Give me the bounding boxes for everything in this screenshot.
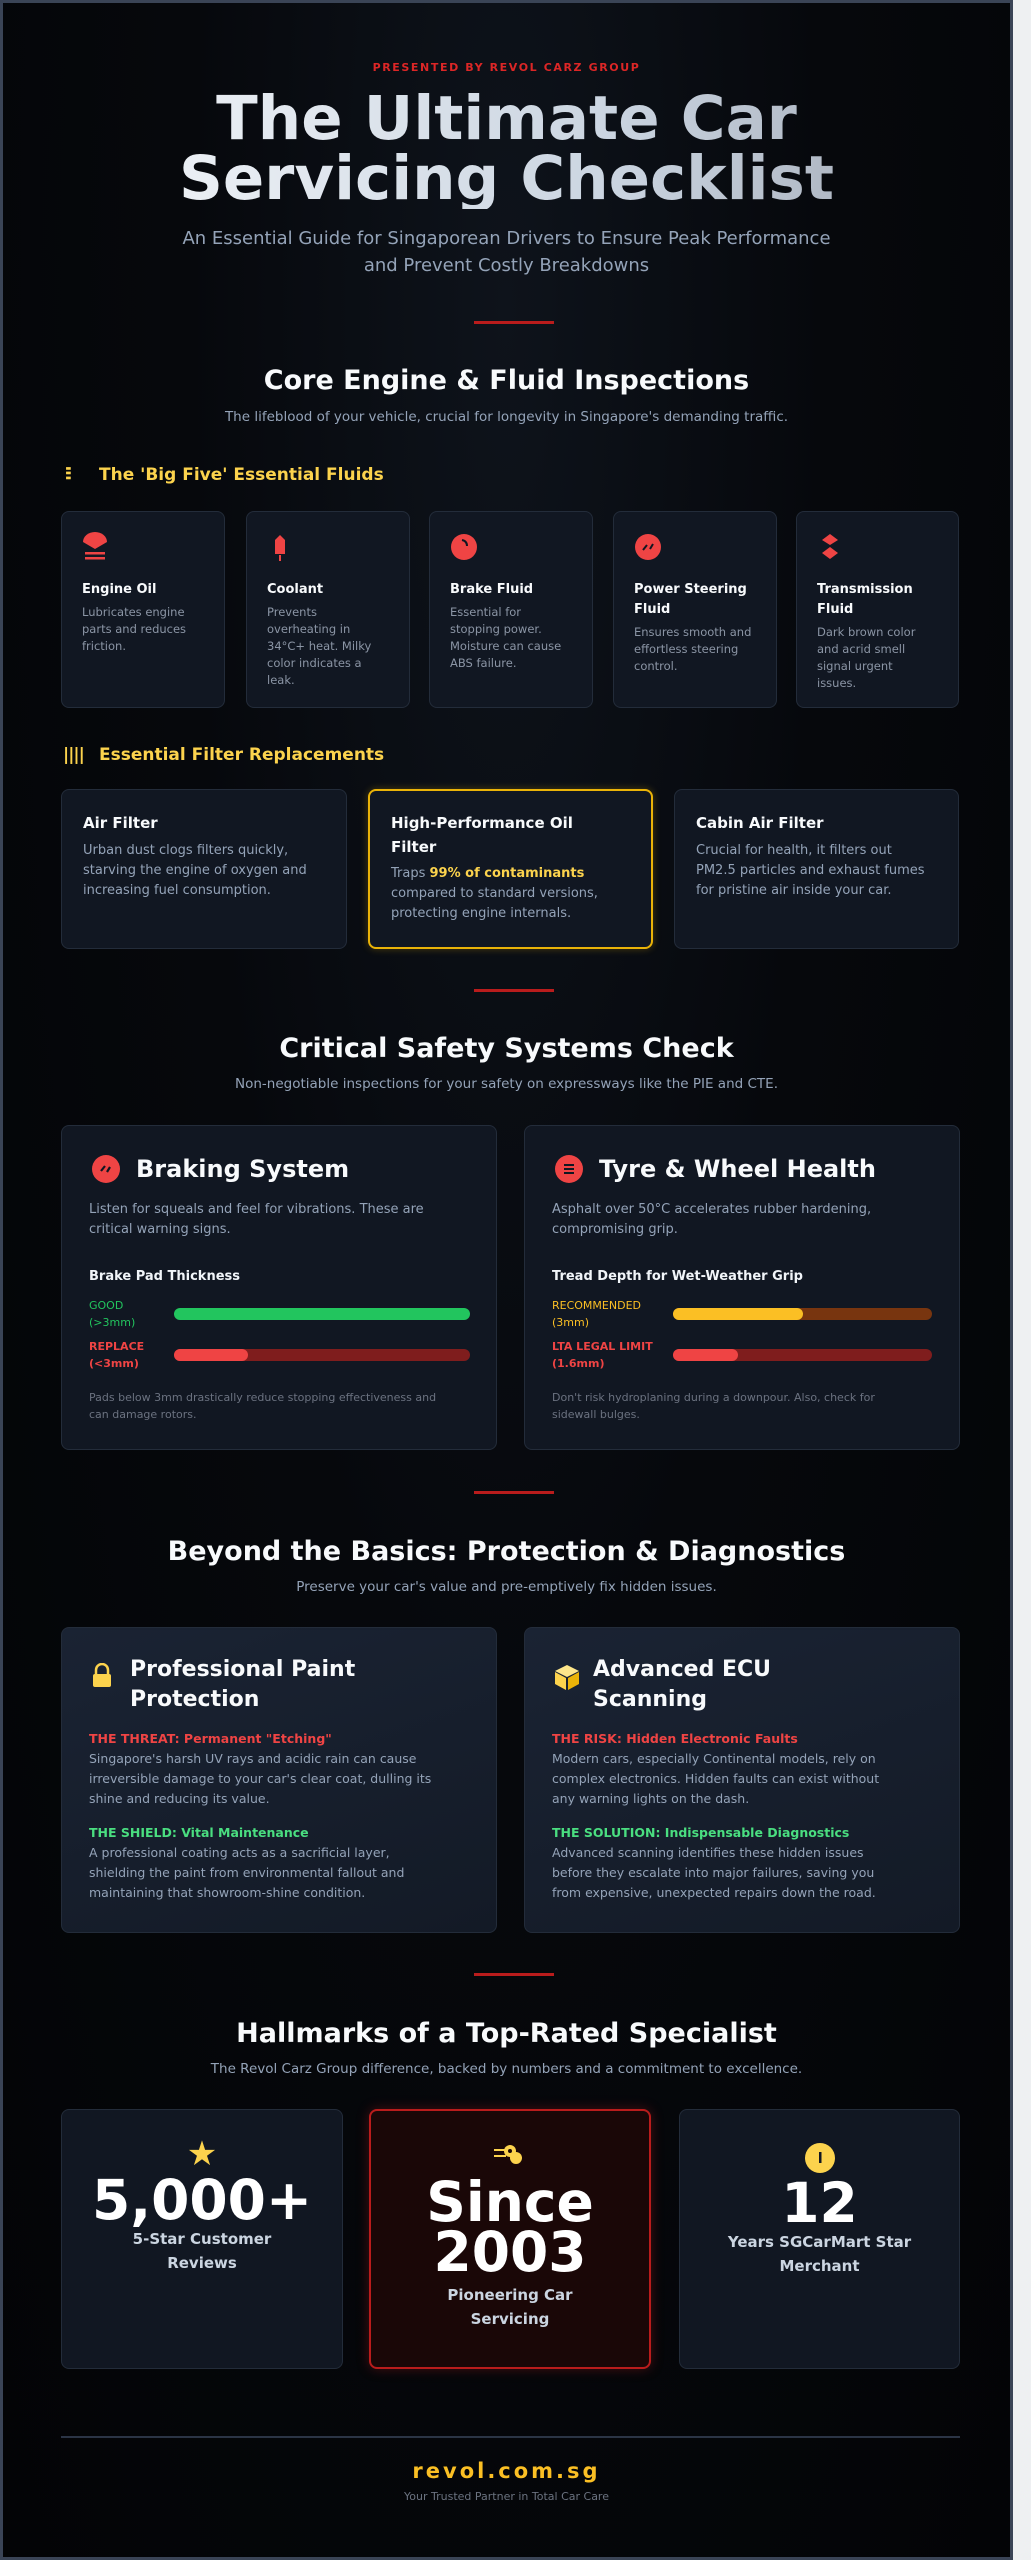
bar: legal limit: LTA LEGAL LIMIT bbox=[552, 1340, 653, 1353]
text: revol.com.sg bbox=[412, 2459, 601, 2483]
card: transmission bbox=[796, 511, 959, 708]
heading: big five: The 'Big Five' Essential Fluids bbox=[99, 465, 384, 485]
icon: engine bbox=[494, 2145, 522, 2164]
icon: info bbox=[805, 2143, 835, 2173]
panel: ECU scanning: before they escalate into major failures, saving you bbox=[552, 1865, 874, 1880]
panel: ECU scanning: Scanning bbox=[593, 1687, 707, 1712]
subtitle: An Essential Guide for Singaporean Drivers to Ensure Peak Performance bbox=[182, 228, 831, 249]
icon: tyre bbox=[555, 1155, 583, 1183]
card: coolant: Coolant bbox=[267, 582, 323, 597]
panel: paint protection: Protection bbox=[130, 1687, 259, 1712]
panel: tyre: compromising grip. bbox=[552, 1222, 678, 1237]
section: beyond: Beyond the Basics: Protection & Diagnostics bbox=[168, 1536, 845, 1567]
stat: 12 years bbox=[679, 2109, 960, 2369]
card: engine oil bbox=[61, 511, 225, 708]
section: safety: Critical Safety Systems Check bbox=[279, 1033, 734, 1064]
card: air filter: Air Filter bbox=[83, 814, 158, 832]
panel: ECU scanning: complex electronics. Hidden faults can exist without bbox=[552, 1771, 879, 1786]
section: core engine: Core Engine & Fluid Inspections bbox=[264, 365, 749, 396]
card: coolant: Prevents bbox=[267, 605, 317, 619]
filter cards bbox=[61, 785, 959, 953]
card: cabin filter bbox=[674, 789, 959, 949]
stat: since 2003: Pioneering Car bbox=[447, 2286, 573, 2304]
card: cabin filter: Cabin Air Filter bbox=[696, 814, 824, 832]
card: coolant bbox=[246, 511, 410, 708]
panel: ECU scanning: Advanced scanning identifies these hidden issues bbox=[552, 1845, 864, 1860]
panel: braking: can damage rotors. bbox=[89, 1408, 196, 1421]
panel: paint protection: A professional coating acts as a sacrificial layer, bbox=[89, 1845, 390, 1860]
icon: oil bbox=[83, 532, 107, 560]
card: brake fluid: Essential for stopping power. Moisture can cause ABS failure. bbox=[450, 605, 561, 670]
icon: star: ★ bbox=[187, 2134, 217, 2174]
panel: paint protection: THE SHIELD: Vital Maintenance bbox=[89, 1825, 309, 1840]
text: Preserve your car's value and pre-emptively fix hidden issues. bbox=[296, 1579, 717, 1595]
icon: cube bbox=[555, 1665, 579, 1690]
panel: tyre bbox=[524, 1125, 960, 1450]
section: hallmarks: Hallmarks of a Top-Rated Specialist bbox=[236, 2018, 777, 2049]
heading: filters: Essential Filter Replacements bbox=[99, 745, 384, 765]
bar: recommended: (3mm) bbox=[552, 1316, 589, 1329]
panel: braking bbox=[61, 1125, 497, 1450]
stat: reviews: Reviews bbox=[167, 2254, 237, 2272]
card: engine oil: Engine Oil bbox=[82, 582, 156, 597]
panel: braking: Braking System bbox=[136, 1155, 349, 1183]
panel: tyre: Don't risk hydroplaning during a downpour. Also, check for bbox=[552, 1391, 875, 1404]
panel: braking: critical warning signs. bbox=[89, 1222, 231, 1237]
title: The Ultimate Car bbox=[216, 83, 797, 154]
stat: since 2003 bbox=[369, 2109, 651, 2369]
stat: 12 years: Years SGCarMart Star bbox=[728, 2233, 911, 2251]
heading: big five: ⫶⫶ bbox=[65, 465, 70, 485]
presented by: PRESENTED BY REVOL CARZ GROUP bbox=[373, 61, 640, 74]
stat: since 2003: 2003 bbox=[433, 2220, 587, 2284]
panel: braking: Pads below 3mm drastically reduce stopping effectiveness and bbox=[89, 1391, 436, 1404]
fluid cards bbox=[61, 511, 959, 708]
stat: reviews: 5,000+ bbox=[92, 2168, 312, 2232]
card: transmission: Transmission Fluid bbox=[817, 582, 913, 617]
stat: since 2003: Since bbox=[426, 2170, 594, 2234]
card: power steering: Ensures smooth and effortless steering control. bbox=[634, 625, 751, 673]
subtitle bbox=[182, 228, 831, 276]
bar: good bbox=[89, 1299, 135, 1329]
bar: replace bbox=[89, 1340, 144, 1370]
panel: paint protection bbox=[61, 1627, 497, 1933]
card: cabin filter: PM2.5 particles and exhaust fumes for pristine air inside your car. bbox=[696, 863, 925, 898]
stat: reviews bbox=[61, 2109, 343, 2369]
text: The Revol Carz Group difference, backed by numbers and a commitment to excellence. bbox=[211, 2061, 802, 2077]
panel: ECU scanning: Advanced ECU bbox=[593, 1657, 771, 1682]
panel: ECU scanning bbox=[524, 1627, 960, 1933]
card: oil filter highlighted: Traps 99% of contaminants compared to standard versions, protecting engine internals. bbox=[391, 866, 598, 921]
bar: replace: REPLACE bbox=[89, 1340, 144, 1353]
bar: replace: (<3mm) bbox=[89, 1357, 139, 1370]
stat: since 2003: Servicing bbox=[471, 2310, 549, 2328]
stat: 12 years: Merchant bbox=[779, 2257, 860, 2275]
panel: paint protection: shielding the paint from environmental fallout and bbox=[89, 1865, 404, 1880]
card: oil filter highlighted: High-Performance Oil bbox=[391, 814, 573, 832]
panel: paint protection: maintaining that showroom-shine condition. bbox=[89, 1885, 365, 1900]
panel: tyre: Tread Depth for Wet-Weather Grip bbox=[552, 1269, 803, 1284]
icon: transmission bbox=[822, 534, 838, 559]
text: Non-negotiable inspections for your safety on expressways like the PIE and CTE. bbox=[235, 1076, 778, 1092]
card: air filter: Urban dust clogs filters quickly, starving the engine of oxygen and increasing fuel consumption. bbox=[83, 843, 307, 898]
panel: paint protection: shine and reducing its value. bbox=[89, 1791, 270, 1806]
text: Your Trusted Partner in Total Car Care bbox=[404, 2490, 609, 2503]
card: oil filter highlighted: Filter bbox=[391, 838, 436, 856]
bar: recommended bbox=[552, 1299, 641, 1329]
footer bbox=[61, 2436, 960, 2438]
bar: legal limit bbox=[552, 1340, 653, 1370]
title bbox=[3, 89, 1010, 209]
panel: braking: Listen for squeals and feel for vibrations. These are bbox=[89, 1202, 424, 1217]
panel: tyre: Asphalt over 50°C accelerates rubber hardening, bbox=[552, 1202, 871, 1217]
bar: legal limit: (1.6mm) bbox=[552, 1357, 604, 1370]
bar: good: (>3mm) bbox=[89, 1316, 135, 1329]
panel: ECU scanning: THE RISK: Hidden Electronic Faults bbox=[552, 1731, 798, 1746]
icon: steering bbox=[635, 534, 661, 560]
stat: 12 years: 12 bbox=[781, 2171, 858, 2235]
title: Servicing Checklist bbox=[179, 143, 834, 214]
panel: ECU scanning: Modern cars, especially Continental models, rely on bbox=[552, 1751, 876, 1766]
stat: reviews: 5-Star Customer bbox=[133, 2230, 271, 2248]
subtitle: and Prevent Costly Breakdowns bbox=[364, 255, 649, 276]
card: oil filter highlighted bbox=[368, 789, 653, 949]
card: air filter bbox=[61, 789, 347, 949]
panel: paint protection: Professional Paint bbox=[130, 1657, 355, 1682]
icon: lock bbox=[93, 1663, 111, 1687]
card: cabin filter: Crucial for health, it filters out bbox=[696, 843, 892, 858]
panel: paint protection: irreversible damage to your car's clear coat, dulling its bbox=[89, 1771, 431, 1786]
card: power steering: Power Steering Fluid bbox=[634, 582, 747, 617]
card: coolant: overheating in 34°C+ heat. Milky color indicates a leak. bbox=[267, 622, 371, 687]
panel: tyre: sidewall bulges. bbox=[552, 1408, 640, 1421]
icon: brake fluid bbox=[451, 534, 477, 560]
panel: ECU scanning: THE SOLUTION: Indispensable Diagnostics bbox=[552, 1825, 849, 1840]
panel: braking: Brake Pad Thickness bbox=[89, 1269, 240, 1284]
icon: brake bbox=[92, 1155, 120, 1183]
panel: paint protection: THE THREAT: Permanent "Etching" bbox=[89, 1731, 332, 1746]
bar: good: GOOD bbox=[89, 1299, 123, 1312]
panel: ECU scanning: from expensive, unexpected repairs down the road. bbox=[552, 1885, 876, 1900]
card: power steering bbox=[613, 511, 777, 708]
card: engine oil: Lubricates engine parts and reduces friction. bbox=[82, 605, 186, 653]
panel: ECU scanning: any warning lights on the dash. bbox=[552, 1791, 749, 1806]
bar: recommended: RECOMMENDED bbox=[552, 1299, 641, 1312]
heading: filters: |||| bbox=[63, 745, 84, 765]
icon: coolant bbox=[275, 535, 285, 561]
card: brake fluid: Brake Fluid bbox=[450, 582, 533, 597]
panel: tyre: Tyre & Wheel Health bbox=[599, 1155, 876, 1183]
panel: paint protection: Singapore's harsh UV rays and acidic rain can cause bbox=[89, 1751, 416, 1766]
card: brake fluid bbox=[429, 511, 593, 708]
card: transmission: Dark brown color and acrid smell signal urgent issues. bbox=[817, 625, 915, 690]
text: The lifeblood of your vehicle, crucial for longevity in Singapore's demanding traffic. bbox=[225, 409, 788, 425]
